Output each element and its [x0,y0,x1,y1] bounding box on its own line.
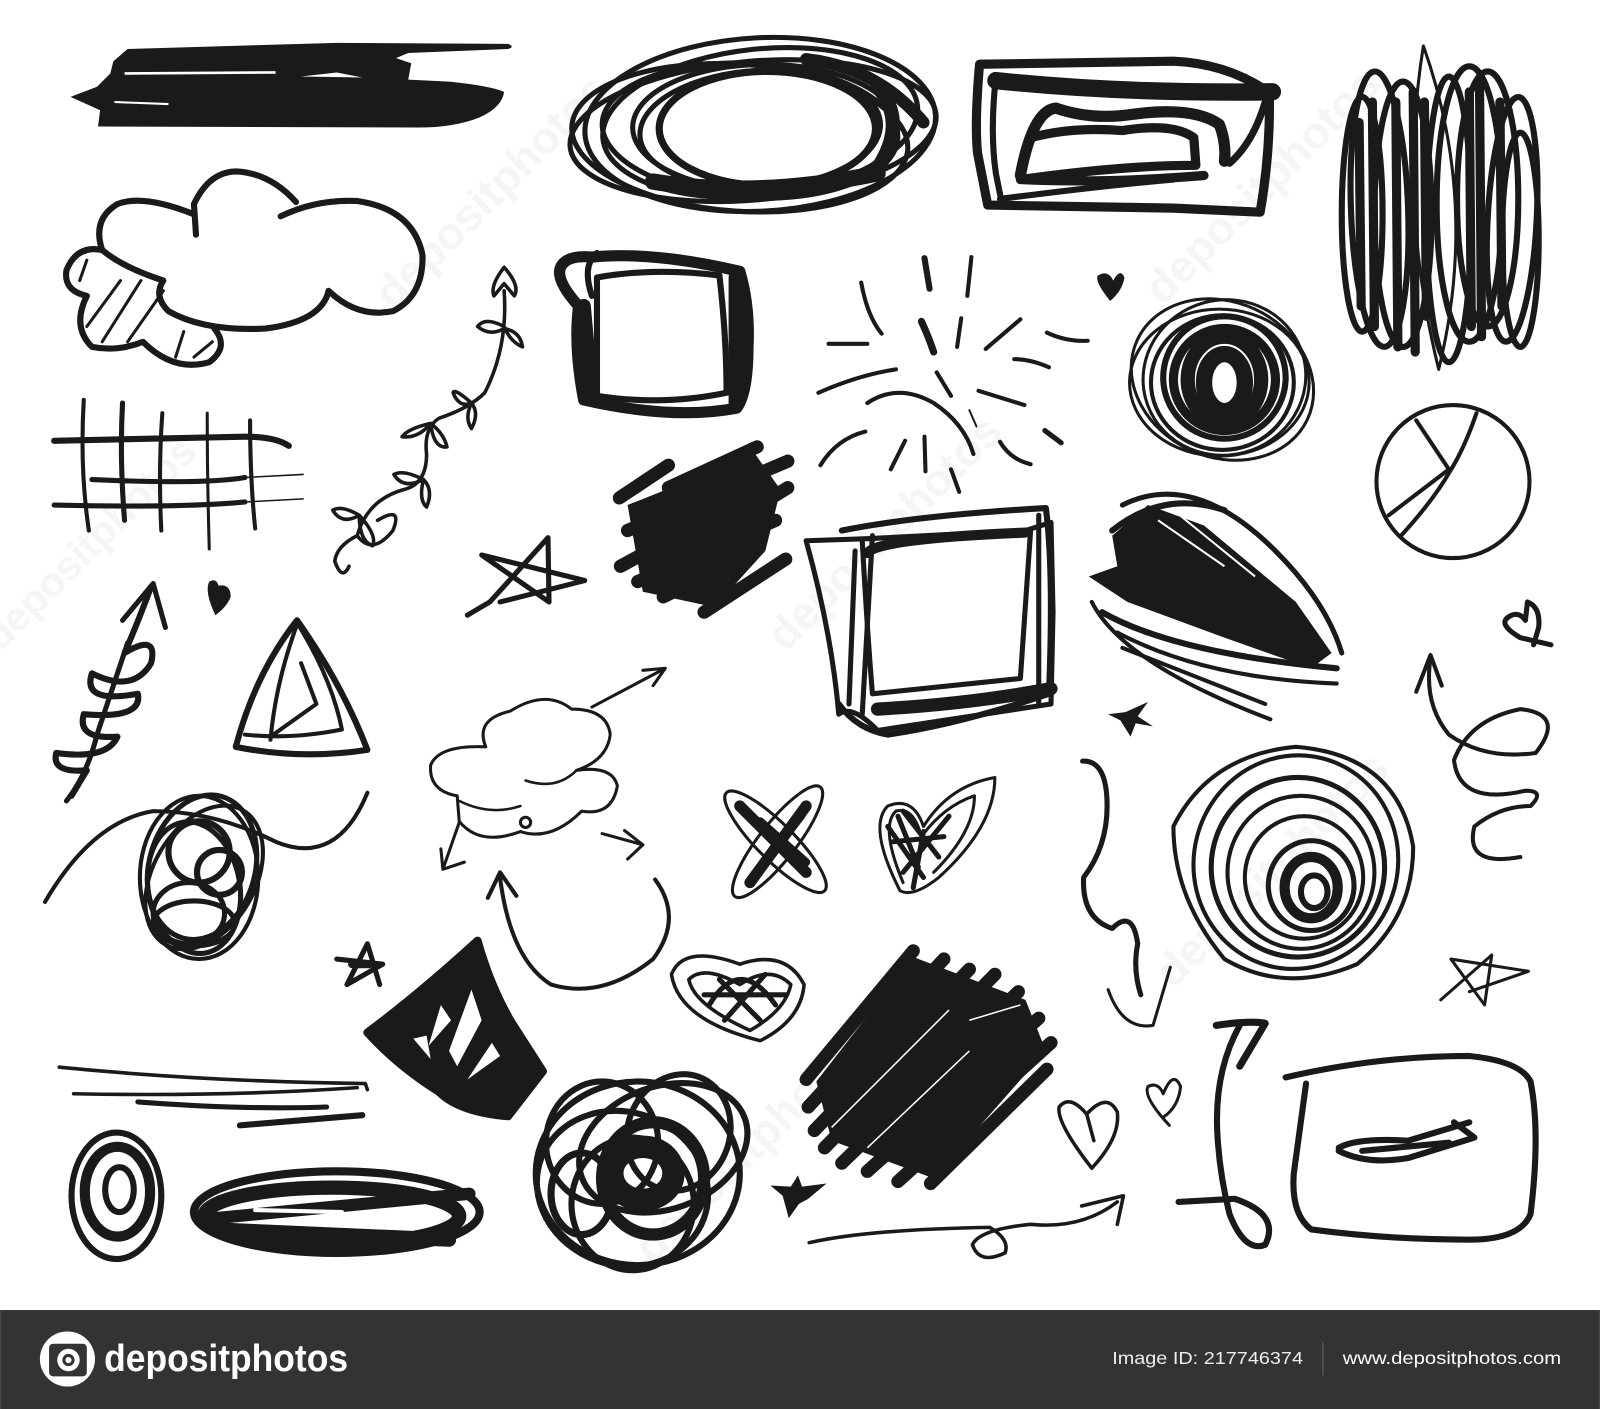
grid doodle [54,400,303,549]
black square scribble [367,941,543,1116]
tangled ball scribble [515,1059,766,1290]
watermark text: depositphotos [1144,742,1399,997]
scribble oval [564,29,942,223]
image id: Image ID: 217746374 [1112,1348,1303,1368]
wave arrow [1083,761,1170,1026]
brush stroke: top left [71,43,512,128]
black scribble oval right [1089,494,1342,719]
scribble heart [880,777,995,893]
small black star bottom [770,1175,827,1218]
watermark text [0,59,1399,1272]
large spiral scribble [1170,732,1422,992]
curly arrow [56,584,165,801]
icon: heart far right [1505,602,1551,645]
outline heart [1059,1102,1118,1168]
triangle scribble [236,620,367,754]
small star lower left [337,944,383,985]
icon: depositphotos camera logo [40,1331,95,1387]
website url: www.depositphotos.com [1342,1348,1561,1368]
watermark text: depositphotos [1134,59,1389,313]
spiral scribble top right [1105,270,1340,489]
cloud with arrows [431,668,665,869]
scribble heart center [671,956,804,1041]
icon: small heart top right [1097,273,1124,301]
speed lines [59,1067,367,1125]
scribble ball with swoosh [45,783,367,970]
cloud with hatching [66,171,423,365]
rectangle with arrow [1286,1056,1536,1240]
scribble X [713,776,838,908]
scribble tall block [1342,46,1543,369]
vine arrow [333,267,522,573]
star lower right [1441,955,1528,1005]
watermark text: depositphotos [624,1018,879,1272]
concentric circle scribble [72,1133,161,1259]
big curly arrow [1179,1022,1269,1246]
small star center [1108,702,1153,737]
spiral arrow right [1416,655,1548,859]
footer bar [0,1310,1600,1409]
watermark text: depositphotos [364,64,619,318]
star doodle [467,538,585,615]
small outline heart [1147,1079,1181,1125]
oval brush scribble [194,1171,480,1253]
scribble square [560,253,748,413]
logo wordmark: depositphotos [104,1337,348,1379]
watermark text: depositphotos [757,405,1011,660]
black scribble block left [619,447,788,612]
pie chart doodle [1376,405,1529,558]
scribble square with jug corner [806,508,1053,735]
burst lines [818,257,1088,492]
black scribble big [806,951,1051,1184]
icon: small heart left [208,580,231,615]
scribble rectangle [976,61,1272,212]
round arrow [488,872,669,989]
swoosh arrow [809,1196,1123,1257]
